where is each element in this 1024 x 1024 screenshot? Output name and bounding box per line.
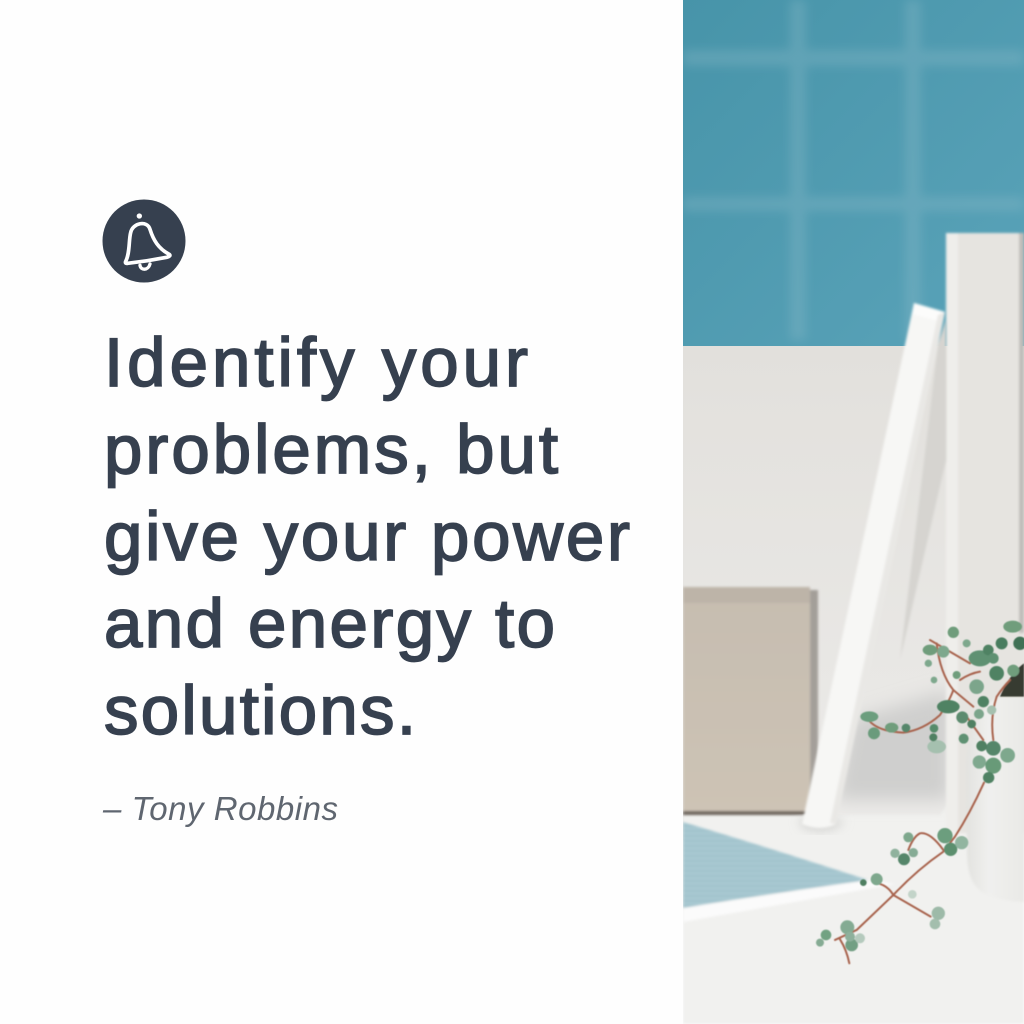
blue plaid wall <box>683 0 1024 346</box>
title: quote <box>104 324 630 749</box>
stems <box>835 640 1010 963</box>
white plant pot <box>966 697 1024 902</box>
standing white book <box>946 233 1024 833</box>
quote line 1: Identify your <box>104 324 528 401</box>
panel: photo <box>683 0 1024 1024</box>
leaves <box>816 621 1024 951</box>
icon: bell badge <box>102 200 186 282</box>
soft shadow behind books <box>835 690 950 800</box>
plant <box>816 621 1024 963</box>
wall background <box>683 340 1024 840</box>
quote line 3: give your power <box>104 498 630 575</box>
attribution: – Tony Robbins <box>102 790 338 827</box>
quote line 4: and energy to <box>104 585 555 662</box>
dark soil <box>1000 663 1024 697</box>
beige box <box>683 587 818 815</box>
leaning white book <box>800 303 946 831</box>
notebook <box>683 822 895 922</box>
quote line 2: problems, but <box>104 411 558 488</box>
table top <box>683 840 1024 1024</box>
quote line 5: solutions. <box>104 672 416 749</box>
